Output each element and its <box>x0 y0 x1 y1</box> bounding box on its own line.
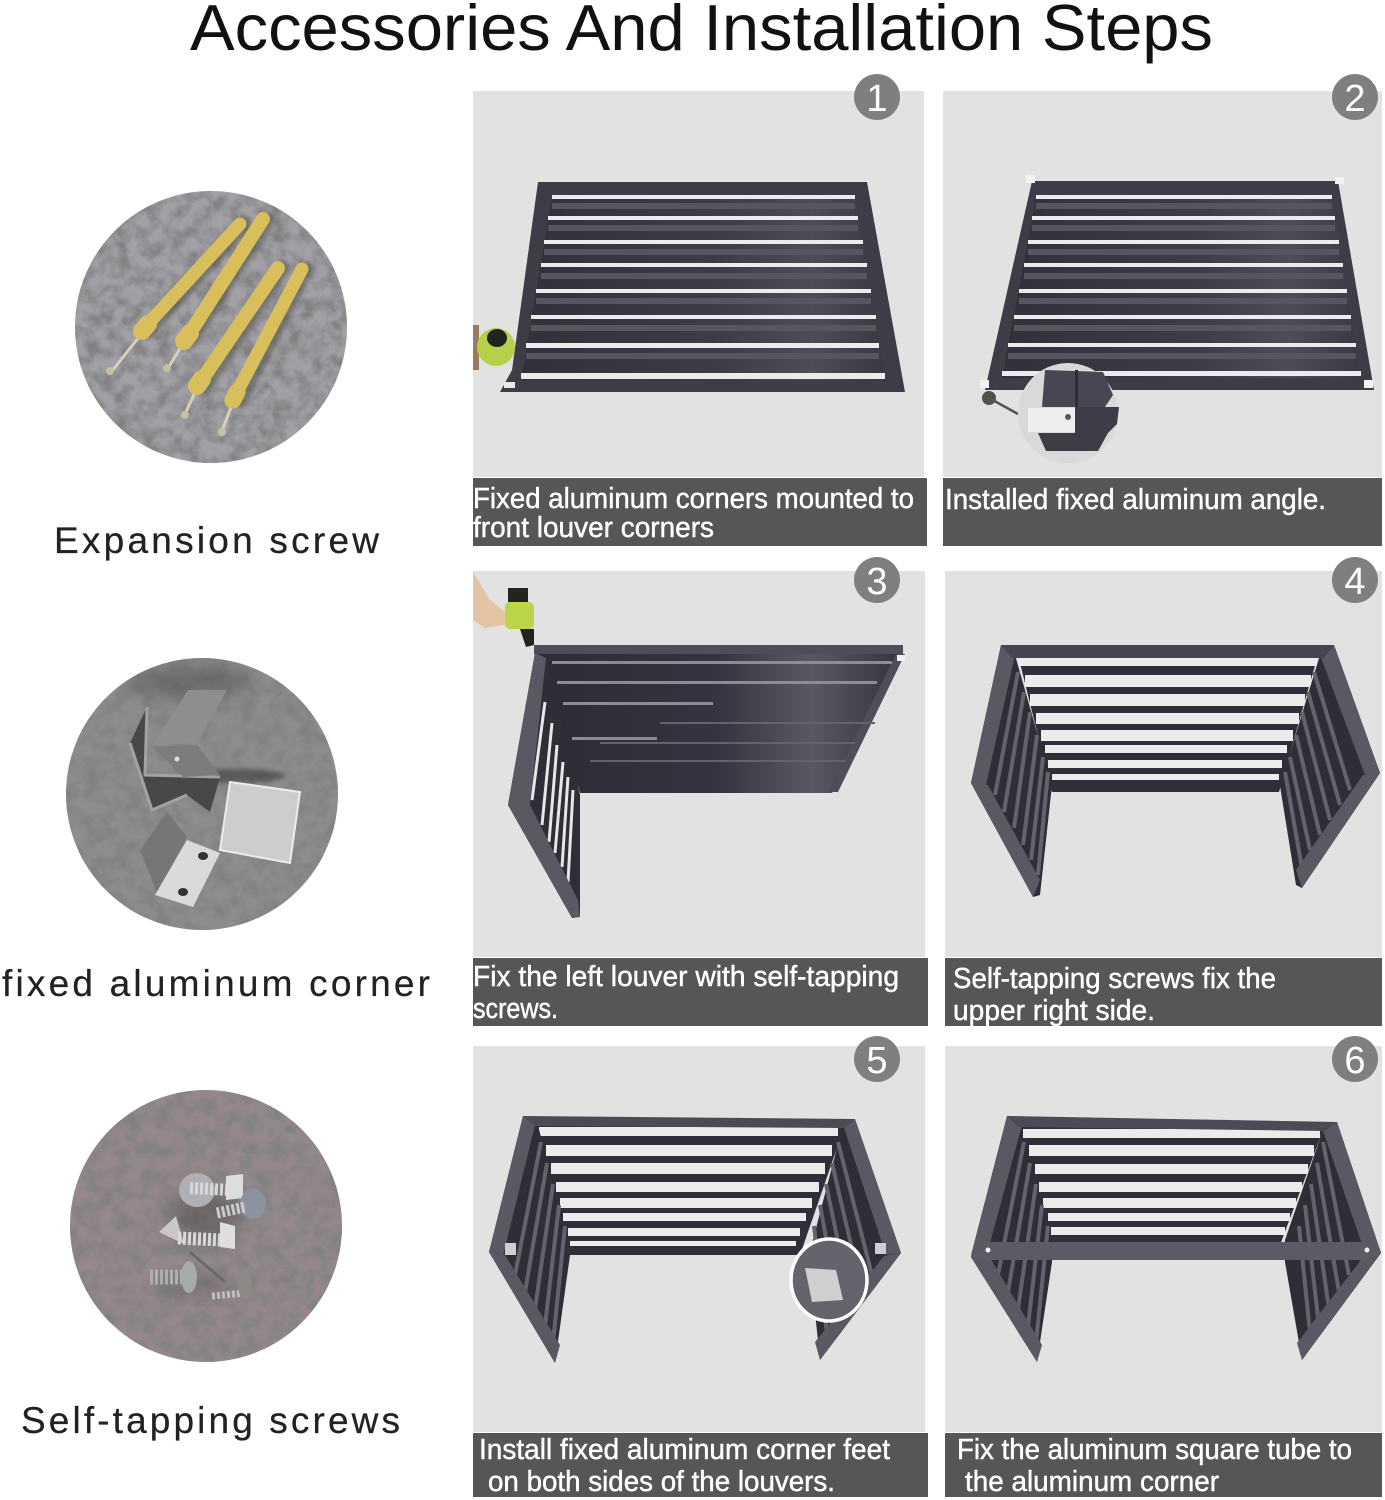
panel background <box>473 571 925 957</box>
number badge <box>1332 1036 1378 1082</box>
label: Self-tapping screws <box>21 1400 400 1441</box>
accessory: self-tapping screws <box>21 1090 400 1441</box>
caption <box>473 958 928 1026</box>
caption: Installed fixed aluminum angle. <box>945 484 1326 516</box>
louver illustration <box>508 645 905 918</box>
number badge <box>854 1036 900 1082</box>
label: fixed aluminum corner <box>2 963 430 1004</box>
number badge <box>854 557 900 603</box>
callout: aluminum corner foot detail <box>791 1239 867 1321</box>
panel background <box>473 91 924 477</box>
panel background <box>473 1046 925 1432</box>
caption: Fix the aluminum square tube to <box>957 1434 1352 1466</box>
number badge <box>854 74 900 120</box>
panel background <box>945 1046 1382 1432</box>
panel: step 5 <box>473 1036 928 1498</box>
caption: Fixed aluminum corners mounted to <box>473 483 914 515</box>
number badge: 6 <box>1344 1040 1366 1082</box>
caption: on both sides of the louvers. <box>488 1466 835 1498</box>
photo: screws on stone <box>70 1090 342 1362</box>
caption <box>945 958 1382 1027</box>
caption: the aluminum corner <box>965 1466 1219 1498</box>
caption <box>473 1433 928 1498</box>
panel: step 6 <box>945 1036 1382 1498</box>
label: Expansion screw <box>54 520 379 561</box>
caption: upper right side. <box>953 995 1155 1027</box>
louver illustration <box>500 182 905 392</box>
caption: Self-tapping screws fix the <box>953 963 1276 995</box>
panel: step 3 <box>473 557 928 1026</box>
panel: step 1 <box>473 74 927 546</box>
louver illustration <box>980 175 1374 390</box>
louver box illustration <box>489 1116 901 1363</box>
photo: expansion screws on stone <box>75 191 347 463</box>
icon: drill with hand <box>473 572 534 647</box>
caption <box>473 478 927 546</box>
caption <box>943 478 1382 546</box>
icon: drill <box>473 325 515 388</box>
caption <box>945 1433 1382 1498</box>
number badge <box>1332 557 1378 603</box>
panel background <box>943 91 1382 477</box>
panel: step 4 <box>945 557 1382 1027</box>
number badge: 4 <box>1344 561 1366 603</box>
accessory: fixed aluminum corner <box>2 658 430 1004</box>
louver box illustration <box>971 1116 1381 1362</box>
photo: aluminum corners on stone <box>66 658 338 930</box>
number badge: 2 <box>1344 78 1366 120</box>
caption: Install fixed aluminum corner feet <box>479 1434 890 1466</box>
panel: step 2 <box>943 74 1382 546</box>
number badge: 3 <box>866 561 888 603</box>
callout: corner detail <box>982 363 1119 463</box>
number badge: 5 <box>866 1040 888 1082</box>
panel background <box>945 571 1382 957</box>
caption: Fix the left louver with self-tapping <box>473 961 899 993</box>
number badge: 1 <box>866 78 888 120</box>
number badge <box>1332 74 1378 120</box>
accessory: expansion screw <box>54 191 379 561</box>
caption: front louver corners <box>473 512 714 544</box>
louver box illustration <box>971 645 1380 897</box>
caption: screws. <box>473 993 558 1025</box>
